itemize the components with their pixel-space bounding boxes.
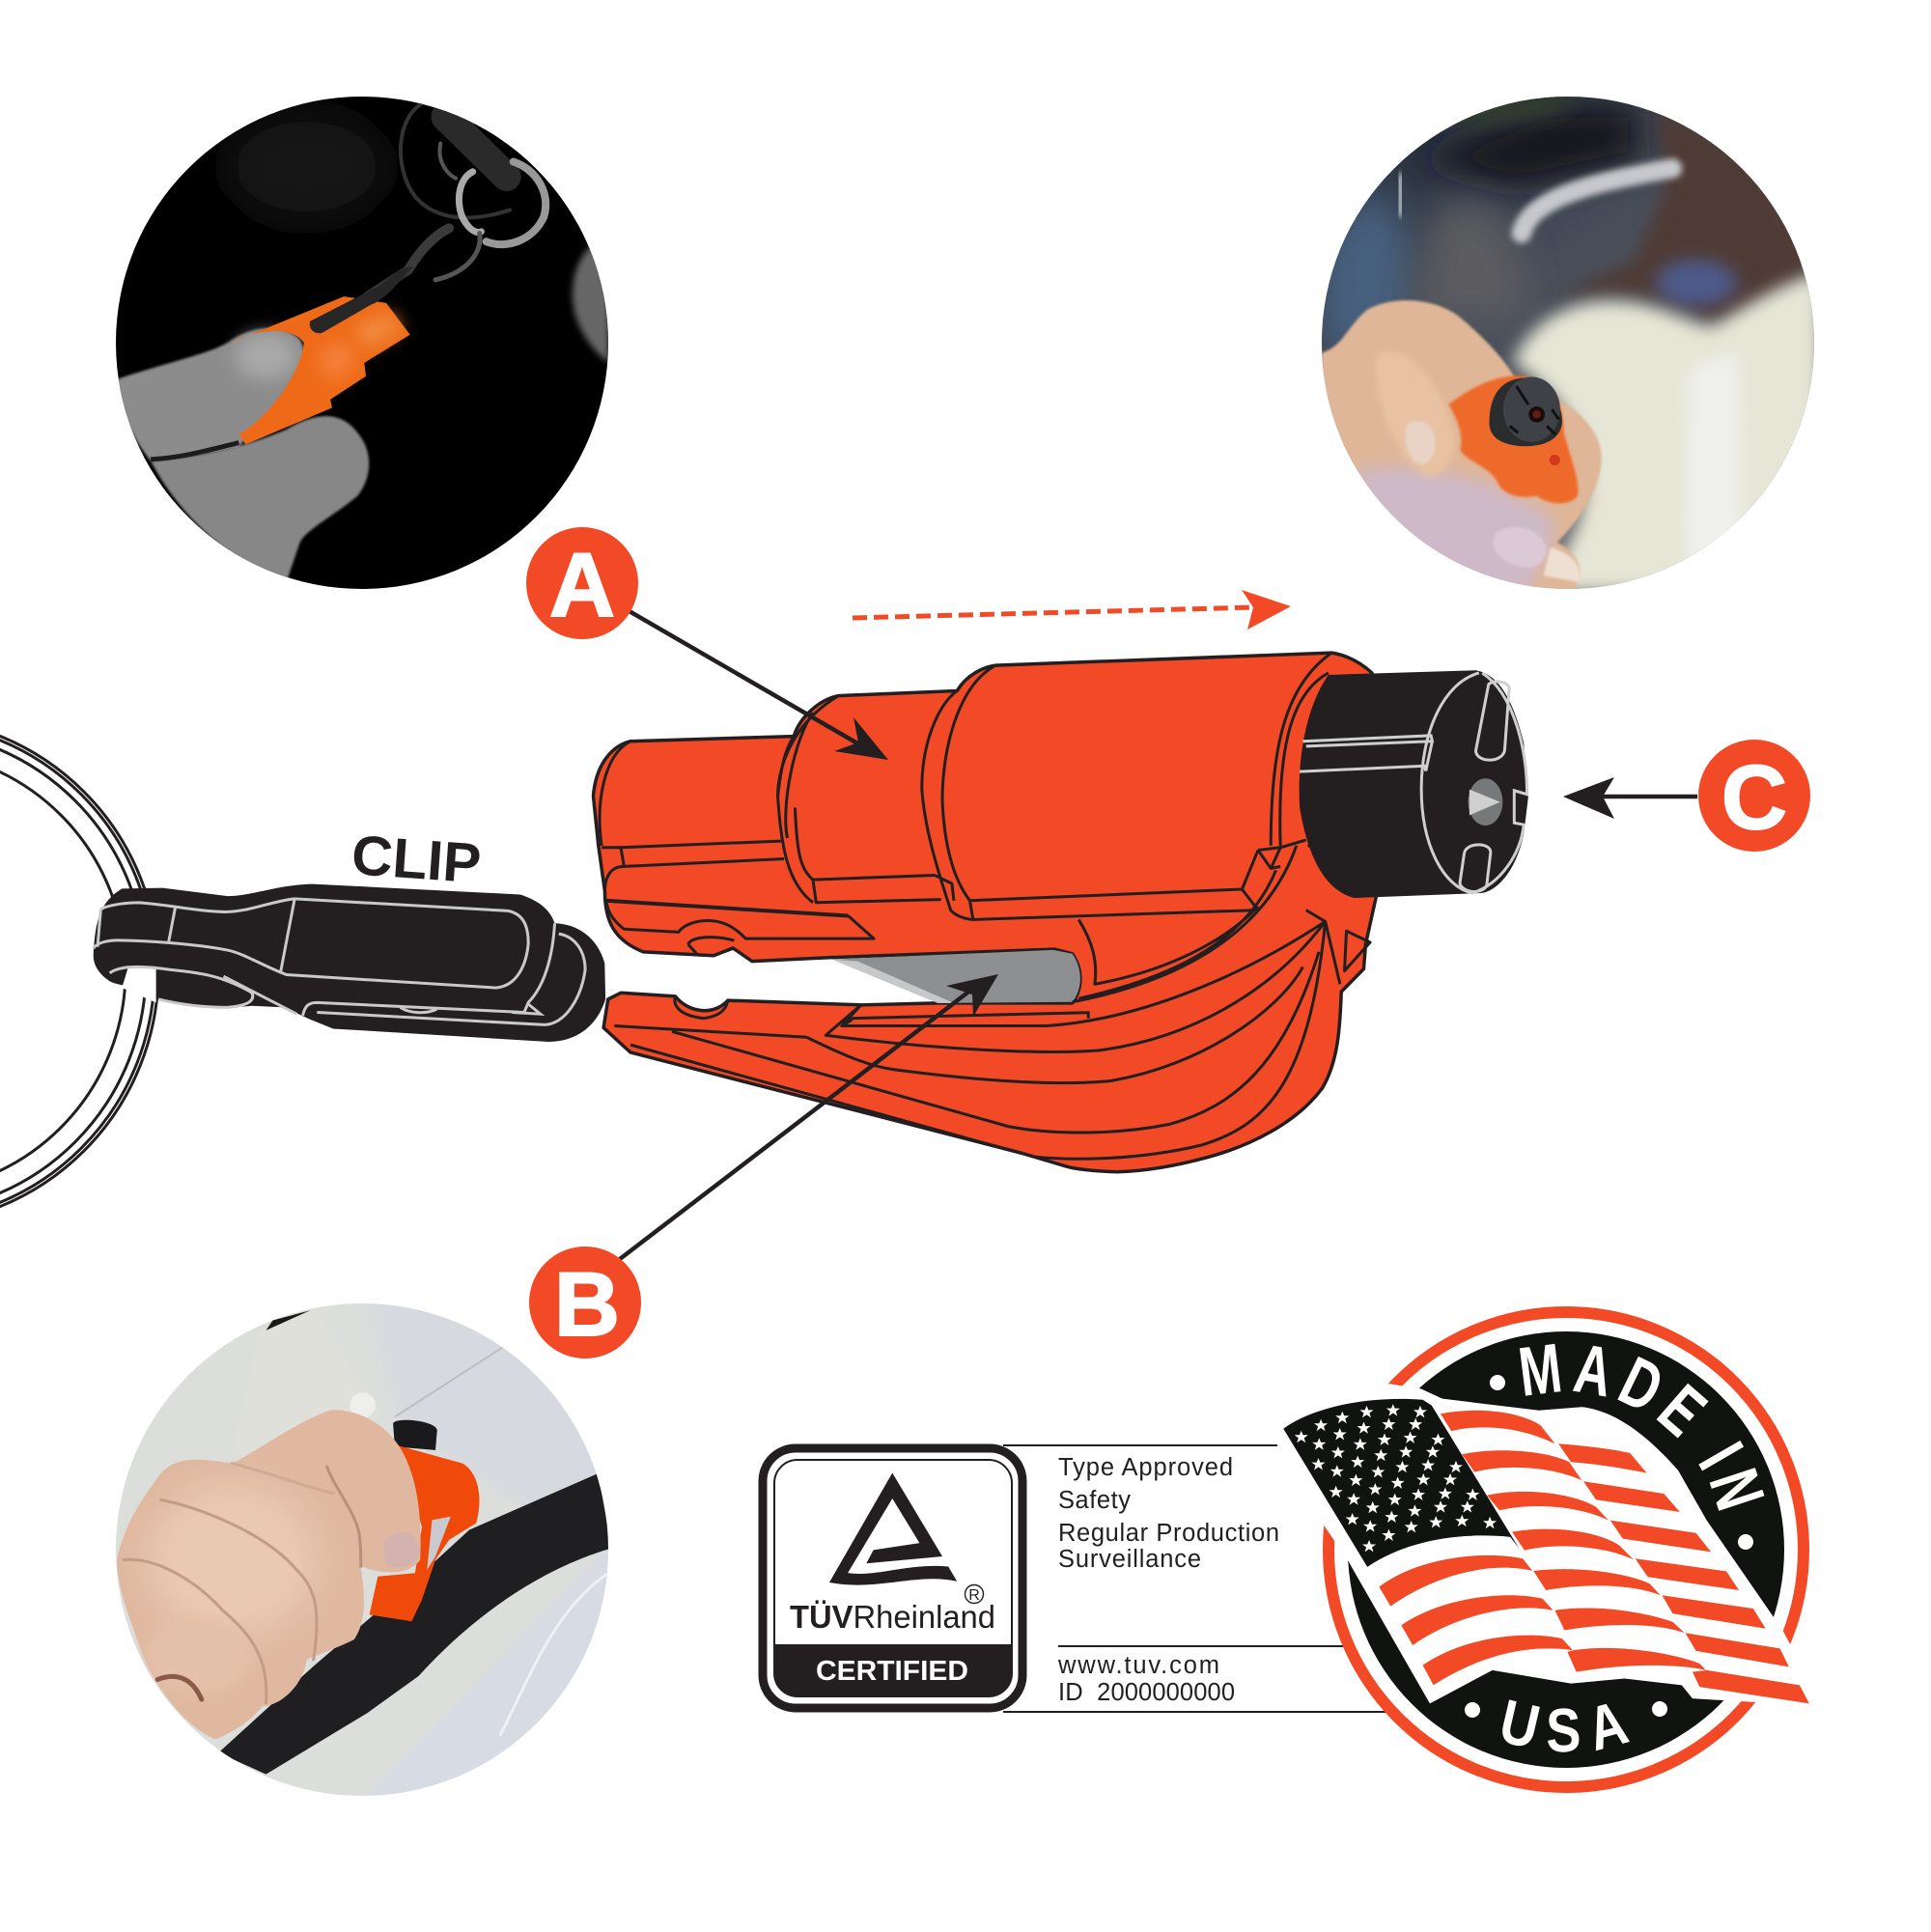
- arrow B: [620, 974, 998, 1259]
- TUV Rheinland certified badge: [763, 1448, 1022, 1708]
- badge A: A: [549, 534, 615, 635]
- orange tool: [1448, 376, 1578, 503]
- ring loop passing through clip: [122, 966, 156, 1002]
- arrow A: [628, 610, 888, 760]
- certification text panel: Surveillance: [1058, 1546, 1201, 1573]
- pale headrest: [1522, 168, 1672, 234]
- badge B: B: [554, 1253, 620, 1355]
- dark background glow: [225, 110, 388, 223]
- photo: keychain tool in hand: [115, 96, 609, 590]
- fist: [117, 1410, 421, 1739]
- shirt shading: [409, 1307, 604, 1508]
- photo: glass breaker pointed at window: [1322, 97, 1821, 596]
- made in USA seal: MADE IN: [1520, 1344, 1765, 1511]
- TUV Rheinland certified badge: TÜVRheinland: [790, 1599, 995, 1635]
- thumb: [116, 328, 304, 461]
- flag stripes: [1379, 1411, 1809, 1703]
- badge C: [1698, 740, 1810, 852]
- black glass breaker cap: [1300, 670, 1528, 898]
- certification text panel: Type Approved: [1058, 1454, 1233, 1481]
- badge C: C: [1721, 746, 1787, 848]
- TUV Rheinland certified badge: R: [968, 1587, 980, 1604]
- photo: seat belt cutter in fist: [115, 1302, 612, 1797]
- seat belt: [218, 1473, 612, 1775]
- certification text panel: ID 2000000000: [1058, 1679, 1235, 1706]
- made in USA seal: USA: [1502, 1699, 1630, 1752]
- badge B: [529, 1246, 641, 1358]
- key ring: [0, 717, 158, 1225]
- black clip: [310, 266, 413, 333]
- blade: [832, 950, 1080, 1003]
- keyring: [368, 103, 546, 296]
- canton stars: [1295, 1404, 1497, 1552]
- sweater: [1513, 273, 1821, 592]
- flag white body: [1274, 1384, 1810, 1705]
- clip label: CLIP: [350, 824, 483, 895]
- hair: [1551, 107, 1814, 323]
- hand: [1322, 300, 1602, 596]
- flag canton: [1283, 1399, 1519, 1567]
- black belt clip: [94, 884, 605, 1042]
- certification text panel: Regular Production: [1058, 1520, 1279, 1547]
- blurred car interior: [1322, 186, 1414, 347]
- orange device illustration: [593, 653, 1528, 1172]
- breaker tip: [1469, 778, 1502, 826]
- device body: [593, 653, 1392, 1172]
- made in USA seal: [1283, 1306, 1809, 1793]
- tool: [393, 1420, 437, 1450]
- certification text panel: [1003, 1445, 1400, 1712]
- finger: [151, 416, 369, 582]
- triangle logo: [829, 1473, 957, 1585]
- orange device: [231, 296, 410, 444]
- certification text panel: Safety: [1058, 1487, 1131, 1514]
- certification text panel: www.tuv.com: [1057, 1652, 1219, 1679]
- arrow C: [1563, 777, 1697, 819]
- TUV Rheinland certified badge: CERTIFIED: [816, 1656, 968, 1687]
- badge A: [526, 527, 638, 639]
- dashed motion arrow: [853, 590, 1291, 630]
